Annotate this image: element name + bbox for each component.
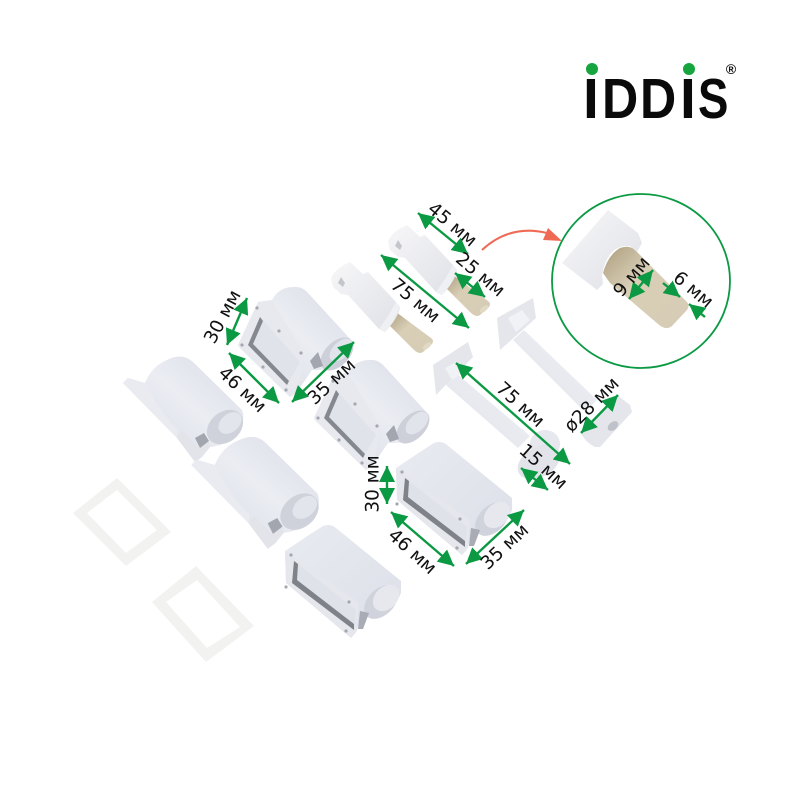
- dimension 46 mm bottom: [384, 512, 454, 579]
- open clamp upper: [123, 356, 250, 462]
- detail circle: [552, 194, 730, 368]
- dimension diameter 28 mm: ø28 мм: [560, 373, 624, 437]
- peg upper: [388, 225, 490, 316]
- logo wordmark: S: [698, 66, 728, 130]
- clamp top: [238, 287, 360, 397]
- logo dots: [586, 63, 695, 75]
- logo wordmark: D: [602, 67, 638, 131]
- open clamp lower: [191, 437, 326, 549]
- logo wordmark: I: [680, 67, 696, 131]
- logo wordmark: I: [583, 67, 599, 131]
- dimension 9 mm: 9 мм: [609, 253, 655, 301]
- dimension 75 mm peg: [381, 255, 469, 328]
- dimension 35 mm bottom: 35 мм: [477, 520, 533, 574]
- dimension 6 mm: 6 мм: [669, 267, 717, 313]
- dimension 30 mm bottom: 30 мм: [362, 455, 384, 513]
- box clamp left: [284, 525, 404, 638]
- red arrow: [482, 228, 562, 250]
- dimension 15 mm: 15 мм: [515, 440, 571, 494]
- logo: IDDIS: [583, 61, 737, 131]
- dimension 75 mm screw: 75 мм: [492, 378, 548, 432]
- dimension 30 mm top: 30 мм: [200, 287, 246, 347]
- dimension 35 mm top: 35 мм: [304, 355, 360, 409]
- dimension 25 mm: 25 мм: [451, 249, 509, 301]
- screw front: [433, 342, 566, 486]
- dimension 46 mm top: 46 мм: [214, 363, 270, 417]
- zoomed cap: [562, 210, 642, 290]
- clamp middle: [314, 360, 436, 470]
- gasket 1: [73, 478, 171, 566]
- dimension 35 mm top: [292, 342, 360, 409]
- box clamp right: [395, 442, 515, 555]
- screw back: [497, 298, 632, 447]
- dimension 46 mm bottom: 46 мм: [384, 525, 440, 579]
- peg lower: [331, 262, 433, 353]
- dimension 75 mm peg: 75 мм: [386, 275, 444, 327]
- logo wordmark: [583, 66, 728, 131]
- zoomed pin: [603, 247, 688, 328]
- circle outline: [552, 194, 730, 368]
- dimension 45 mm: 45 мм: [423, 199, 481, 251]
- dimension 75 mm screw: [456, 363, 570, 464]
- registered mark: ®: [726, 61, 737, 77]
- gasket 2: [152, 566, 254, 662]
- logo wordmark: D: [640, 67, 676, 131]
